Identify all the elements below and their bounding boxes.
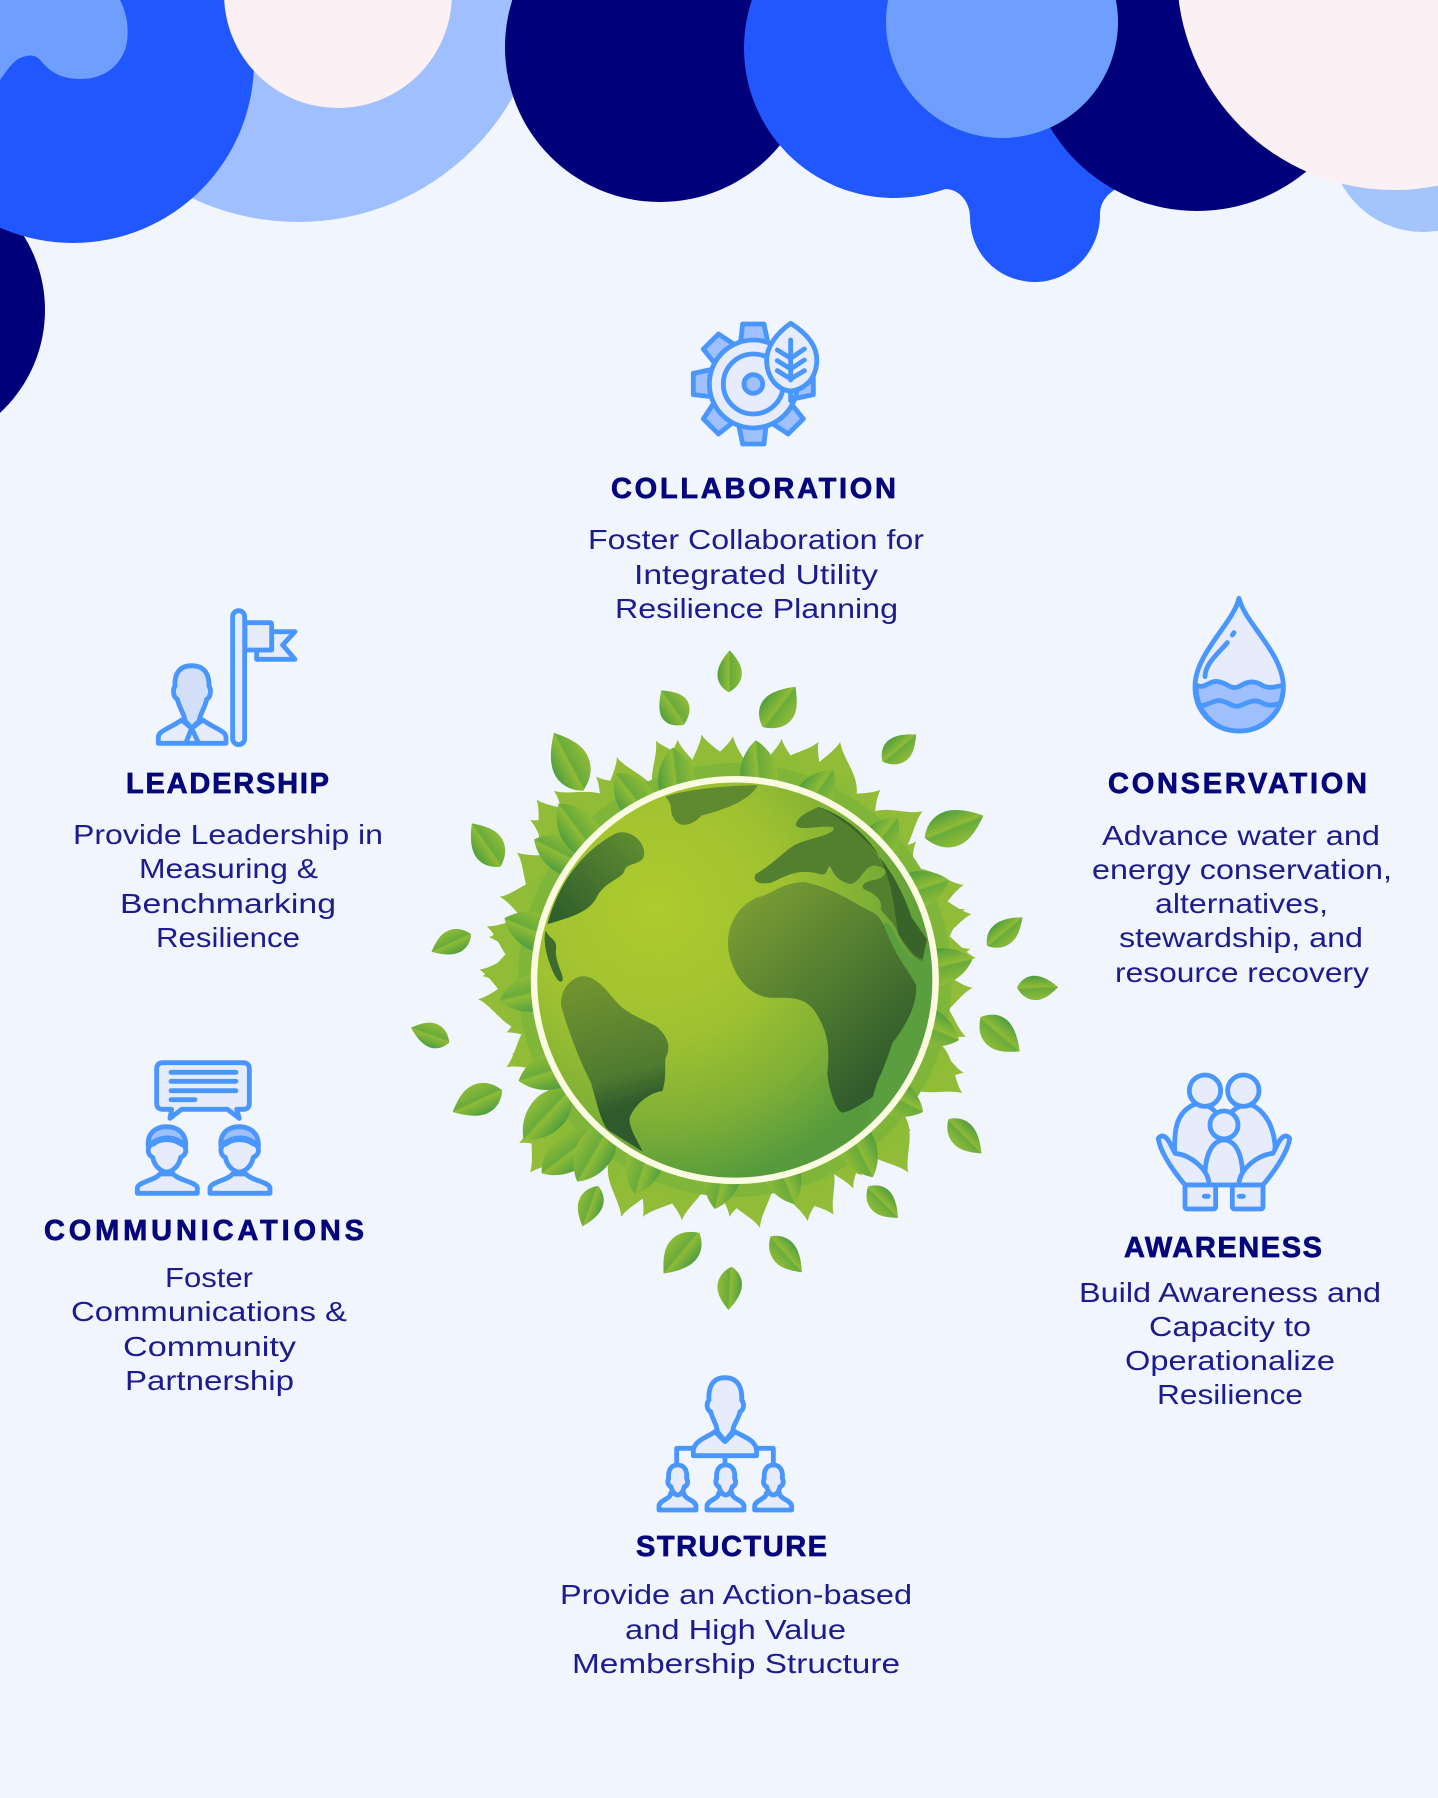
description: energy conservation, — [1092, 854, 1392, 885]
description: Integrated Utility — [634, 559, 878, 590]
description: Benchmarking — [120, 888, 336, 919]
description: Capacity to — [1149, 1311, 1311, 1342]
heading: COMMUNICATIONS — [44, 1215, 364, 1247]
panel: communications — [44, 1063, 364, 1396]
icon: gear with leaf — [693, 323, 817, 444]
panel: collaboration — [588, 323, 924, 624]
heading: LEADERSHIP — [126, 768, 329, 800]
description — [560, 1579, 912, 1679]
globe illustration with leaves — [407, 650, 1059, 1311]
heading: COLLABORATION — [611, 473, 896, 505]
icon: family in hands — [1158, 1075, 1290, 1209]
panel: awareness — [1079, 1075, 1381, 1410]
panel: structure — [560, 1378, 912, 1679]
description — [1092, 820, 1392, 988]
description: Provide Leadership in — [73, 819, 383, 850]
leaf wreath — [474, 728, 979, 1235]
icon: two people with speech bubble — [137, 1063, 270, 1193]
description: Community — [123, 1331, 296, 1362]
description — [71, 1262, 347, 1396]
heading: AWARENESS — [1124, 1232, 1322, 1264]
description: and High Value — [625, 1614, 846, 1645]
description: Advance water and — [1102, 820, 1380, 851]
description: stewardship, and — [1119, 922, 1363, 953]
heading: CONSERVATION — [1108, 768, 1367, 800]
description — [1079, 1277, 1381, 1410]
description: alternatives, — [1155, 888, 1328, 919]
description: Resilience — [156, 922, 300, 953]
description — [73, 819, 383, 953]
top decorative blobs — [0, 0, 1438, 450]
description: Foster Collaboration for — [588, 524, 924, 555]
heading: STRUCTURE — [636, 1531, 827, 1563]
description: Operationalize — [1125, 1345, 1335, 1376]
description — [588, 524, 924, 624]
icon: person with flag — [158, 611, 295, 745]
earth — [534, 779, 938, 1181]
description: Provide an Action-based — [560, 1579, 912, 1610]
description: Membership Structure — [572, 1648, 900, 1679]
description: Partnership — [125, 1365, 294, 1396]
panel: conservation — [1092, 598, 1392, 988]
description: resource recovery — [1115, 957, 1369, 988]
description: Foster — [165, 1262, 253, 1293]
description: Build Awareness and — [1079, 1277, 1381, 1308]
description: Communications & — [71, 1296, 347, 1327]
earth rim — [534, 779, 936, 1181]
description: Resilience — [1157, 1379, 1303, 1410]
description: Resilience Planning — [615, 593, 898, 624]
icon: organization chart — [659, 1378, 792, 1510]
loose leaves — [407, 650, 1059, 1311]
panel: leadership — [73, 611, 383, 953]
icon: water drop — [1195, 598, 1283, 731]
description: Measuring & — [139, 853, 318, 884]
